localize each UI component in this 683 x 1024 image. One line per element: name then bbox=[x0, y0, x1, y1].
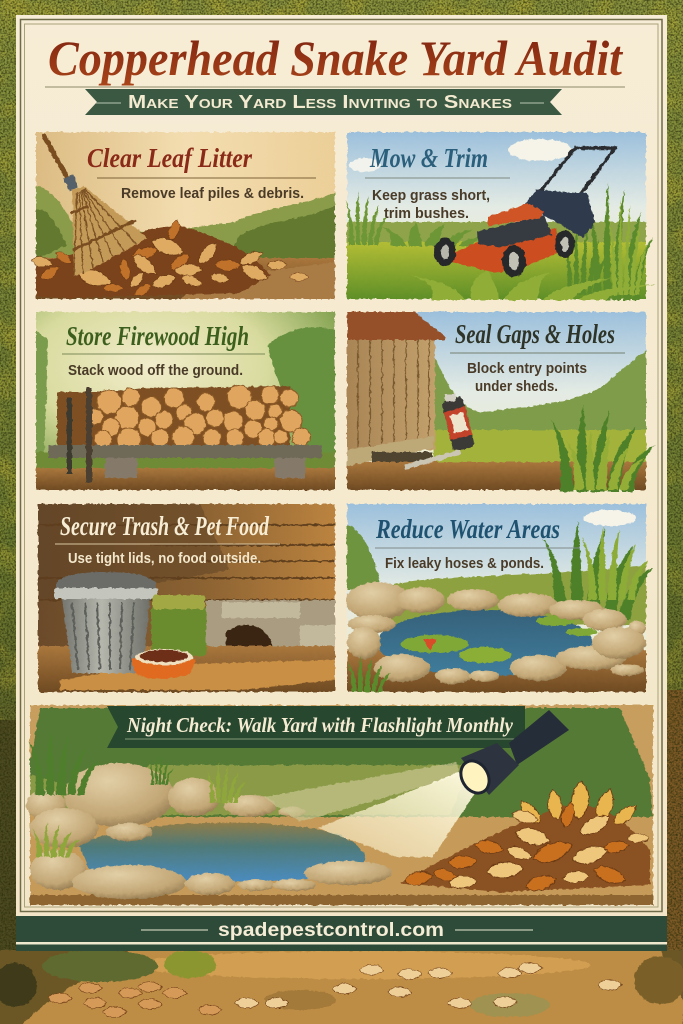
heading: Mow & Trim bbox=[369, 143, 488, 173]
panel: secure trash and pet food bbox=[38, 504, 335, 692]
caption banner bbox=[107, 706, 525, 748]
text: Use tight lids, no food outside. bbox=[68, 551, 261, 567]
icon: rocks bbox=[26, 763, 392, 899]
icon: leaf pile bbox=[31, 218, 309, 298]
heading: Clear Leaf Litter bbox=[87, 143, 252, 173]
text: under sheds. bbox=[475, 379, 558, 395]
panel: clear leaf litter bbox=[31, 132, 335, 299]
caption banner: Night Check: Walk Yard with Flashlight Monthly bbox=[126, 713, 514, 737]
rule bbox=[97, 177, 316, 179]
text: trim bushes. bbox=[384, 206, 469, 222]
heading: Store Firewood High bbox=[66, 321, 249, 351]
icon: shed bbox=[347, 312, 445, 466]
icon: rake bbox=[44, 136, 148, 276]
icon: metal trash can bbox=[54, 572, 158, 673]
scene: sky, reeds, pond, rocks bbox=[346, 504, 653, 692]
footer band bbox=[16, 916, 667, 951]
scene: sky, field, shed bbox=[347, 312, 655, 492]
icon: lily pads bbox=[401, 616, 597, 663]
panel: seal gaps and holes bbox=[347, 312, 655, 492]
icon: leaf pile bbox=[400, 780, 650, 894]
pond bbox=[377, 610, 593, 676]
rule bbox=[365, 177, 510, 179]
text: Remove leaf piles & debris. bbox=[121, 186, 304, 202]
icon: sealant can and tool bbox=[405, 394, 475, 467]
light beam bbox=[264, 762, 475, 857]
pond bbox=[79, 823, 365, 882]
subtitle ribbon: Make Your Yard Less Inviting to Snakes bbox=[128, 91, 512, 112]
rule bbox=[450, 352, 625, 354]
scene: wall, ground, cans, bowl bbox=[38, 504, 335, 692]
text: Stack wood off the ground. bbox=[68, 363, 243, 379]
scene: foliage, pond, rocks, beam, leaves bbox=[26, 705, 653, 905]
icon: green pet food bin bbox=[151, 595, 206, 656]
text: Fix leaky hoses & ponds. bbox=[385, 556, 544, 572]
icon: lawn mower bbox=[434, 148, 615, 277]
subtitle ribbon bbox=[45, 87, 625, 115]
rule bbox=[62, 353, 265, 355]
icon: rocks bbox=[346, 582, 646, 684]
heading: Secure Trash & Pet Food bbox=[60, 511, 269, 541]
scene: sky, lawn, mower bbox=[345, 132, 656, 300]
icon: grass tufts bbox=[29, 731, 246, 857]
icon: firewood stack bbox=[48, 385, 322, 482]
heading: Reduce Water Areas bbox=[375, 514, 560, 544]
rule bbox=[375, 547, 580, 549]
text: Block entry points bbox=[467, 361, 587, 377]
scene: hedge, ground, leaves, rake bbox=[31, 132, 335, 299]
panel: mow and trim bbox=[345, 132, 656, 300]
icon: flashlight bbox=[455, 710, 569, 798]
text bbox=[372, 188, 490, 222]
scene: foliage, bench, wood stack bbox=[36, 312, 335, 490]
title: Copperhead Snake Yard Audit bbox=[48, 30, 624, 86]
panel: reduce water areas bbox=[346, 504, 653, 692]
heading: Seal Gaps & Holes bbox=[455, 319, 615, 349]
icon: pet bowl bbox=[131, 649, 196, 678]
panel: store firewood high bbox=[36, 312, 335, 490]
ground strip at the bottom bbox=[0, 950, 683, 1024]
panel: night check bbox=[26, 705, 653, 905]
footer band: spadepestcontrol.com bbox=[218, 920, 444, 941]
text: Keep grass short, bbox=[372, 188, 490, 204]
rule bbox=[55, 543, 280, 545]
